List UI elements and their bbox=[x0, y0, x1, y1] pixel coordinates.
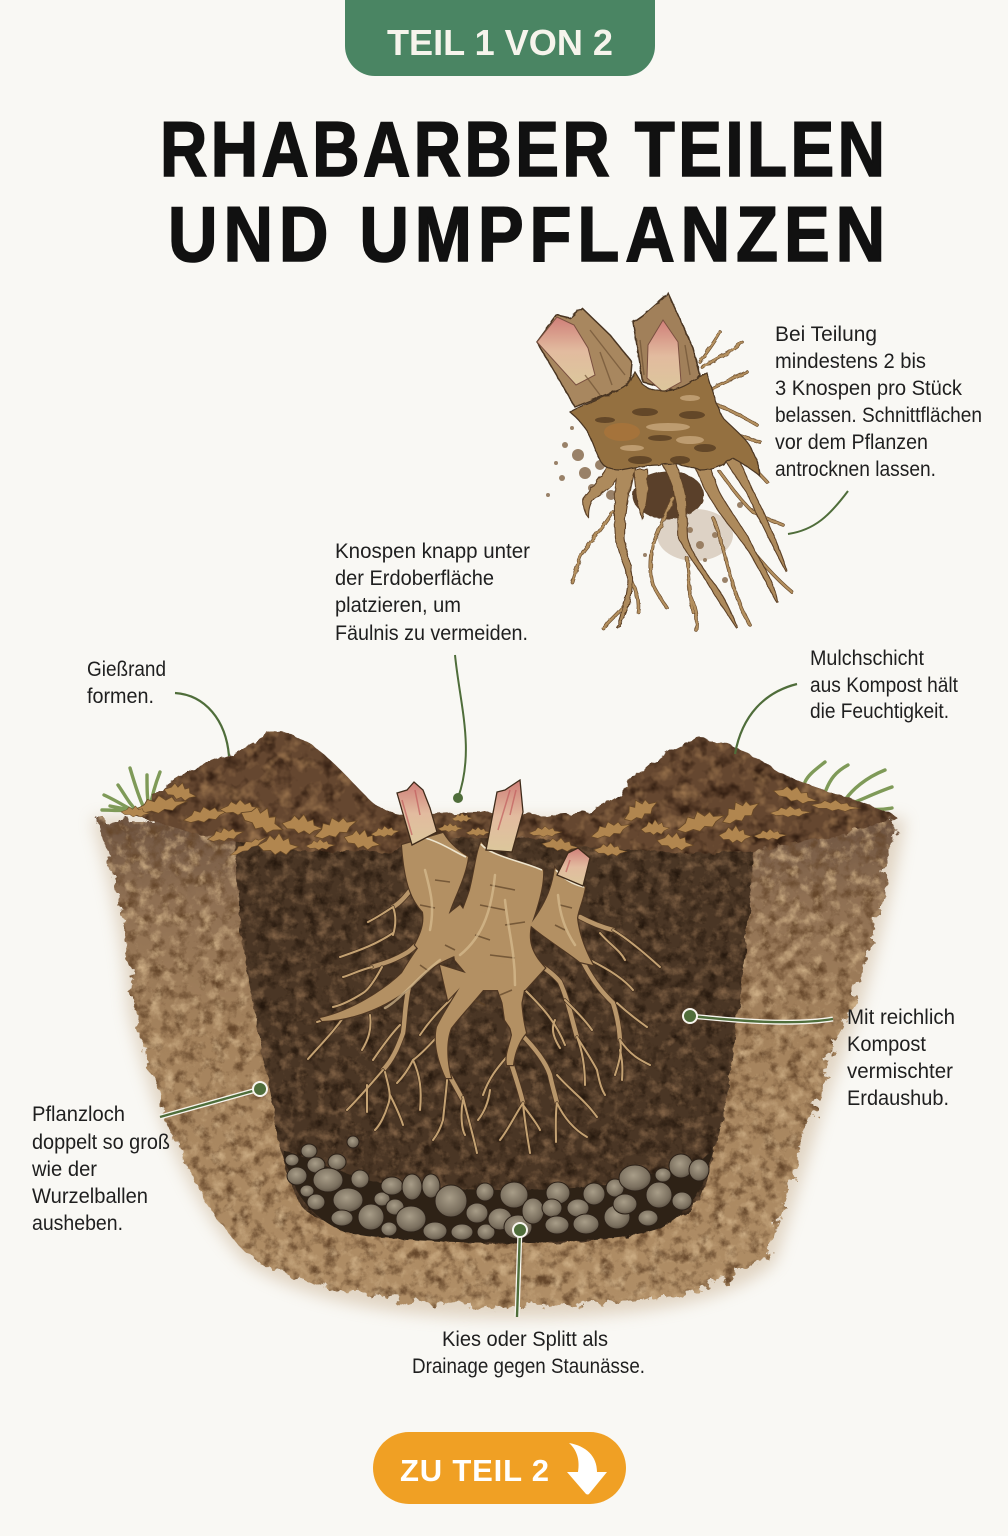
label: Knospen: der Erdoberfläche bbox=[335, 567, 494, 590]
title bbox=[160, 107, 885, 278]
crown body bbox=[570, 372, 760, 476]
root hairs outline bbox=[572, 332, 792, 630]
label: Teilung bbox=[775, 323, 982, 481]
label: Teilung: 3 Knospen pro Stück bbox=[775, 377, 962, 400]
label: Pflanzloch: ausheben. bbox=[32, 1212, 123, 1235]
label: Erdaushub bbox=[847, 1006, 955, 1110]
label: Erdaushub: Kompost bbox=[847, 1033, 926, 1056]
bud streaks bbox=[402, 790, 570, 872]
thin roots outline bbox=[308, 907, 660, 1153]
root fingers outline bbox=[584, 438, 787, 628]
compost mounds and mulch bed bbox=[135, 732, 895, 853]
label: Knospen: Knospen knapp unter bbox=[335, 540, 530, 563]
label: Erdaushub: Erdaushub. bbox=[847, 1087, 949, 1110]
label: Pflanzloch: Pflanzloch bbox=[32, 1103, 125, 1126]
dark root centre bbox=[632, 471, 704, 519]
label: Pflanzloch: doppelt so groß bbox=[32, 1131, 170, 1154]
left pink bud bbox=[537, 317, 595, 385]
label: Teilung: vor dem Pflanzen bbox=[775, 431, 928, 454]
button: Zu Teil 2: ZU TEIL 2 bbox=[400, 1453, 549, 1488]
thin roots bbox=[308, 907, 660, 1153]
left bud bbox=[397, 782, 437, 845]
title: RHABARBER TEILEN bbox=[160, 107, 885, 193]
illustration: planting hole cross-section bbox=[92, 732, 905, 1318]
medium roots bbox=[372, 887, 620, 1103]
mulch leaves bbox=[121, 779, 861, 858]
label: Pflanzloch bbox=[31, 1103, 170, 1235]
leader line: Pflanzloch bbox=[160, 1082, 267, 1117]
label: Teilung: Bei Teilung bbox=[775, 323, 877, 346]
leader line: Gießrand bbox=[175, 693, 229, 756]
label: Kies: Drainage gegen Staunässe. bbox=[412, 1355, 645, 1378]
main roots bbox=[320, 833, 593, 1078]
centre bud bbox=[486, 780, 523, 852]
button: Zu Teil 2 bbox=[373, 1432, 626, 1504]
label: Pflanzloch: Wurzelballen bbox=[32, 1185, 148, 1208]
dirt wash below roots bbox=[657, 509, 733, 561]
banner: Teil 1 von 2: TEIL 1 VON 2 bbox=[387, 22, 613, 63]
crown markings bbox=[595, 395, 716, 464]
leader line: Teilung bbox=[788, 491, 848, 534]
root hairs bbox=[572, 332, 792, 630]
illustration: divided rhubarb root bbox=[537, 293, 792, 630]
label: Mulchschicht: Mulchschicht bbox=[810, 647, 924, 670]
main roots outline bbox=[320, 833, 593, 1078]
label: Knospen: Fäulnis zu vermeiden. bbox=[335, 622, 528, 645]
dark compost soil in hole bbox=[235, 835, 755, 1243]
label: Gießrand formen: formen. bbox=[87, 685, 154, 708]
leader line: Erdaushub bbox=[683, 1009, 833, 1023]
icon: curved down arrow bbox=[567, 1443, 607, 1494]
label: Pflanzloch: wie der bbox=[31, 1158, 97, 1181]
collar rims bbox=[425, 838, 584, 887]
root highlights bbox=[385, 870, 575, 1008]
label: Gießrand formen bbox=[87, 658, 166, 708]
grass tufts bbox=[102, 762, 892, 812]
right bud stalk bbox=[633, 293, 700, 392]
title: UND UMPFLANZEN bbox=[168, 190, 885, 278]
label: Gießrand formen: Gießrand bbox=[87, 658, 166, 681]
root texture bbox=[420, 880, 572, 1005]
banner: Teil 1 von 2 bbox=[345, 0, 655, 76]
leader line: Mulchschicht bbox=[735, 684, 797, 754]
leader line: Knospen bbox=[453, 655, 466, 803]
label: Erdaushub: vermischter bbox=[847, 1060, 953, 1083]
left bud stalk bbox=[537, 308, 632, 407]
label: Knospen: platzieren, um bbox=[335, 594, 461, 617]
label: Teilung: mindestens 2 bis bbox=[775, 350, 926, 373]
leader line: Kies bbox=[513, 1223, 527, 1317]
label: Mulchschicht: aus Kompost hält bbox=[810, 674, 958, 697]
label: Kies bbox=[412, 1328, 645, 1378]
loose soil crumbs bbox=[546, 426, 754, 583]
sandy soil body bbox=[98, 820, 897, 1307]
right pink bud bbox=[647, 320, 681, 392]
stalk grain bbox=[585, 330, 690, 395]
label: Teilung: antrocknen lassen. bbox=[775, 458, 936, 481]
label: Mulchschicht bbox=[810, 647, 958, 723]
drainage gravel bbox=[283, 1136, 712, 1243]
label: Erdaushub: Mit reichlich bbox=[847, 1006, 955, 1029]
surrounding soil wash bbox=[92, 818, 905, 1318]
label: Knospen bbox=[335, 540, 530, 645]
label: Mulchschicht: die Feuchtigkeit. bbox=[810, 700, 949, 723]
label: Teilung: belassen. Schnittflächen bbox=[775, 404, 982, 427]
root fingers bbox=[584, 438, 787, 628]
right bud bbox=[557, 848, 590, 886]
label: Kies: Kies oder Splitt als bbox=[442, 1328, 608, 1351]
medium roots outline bbox=[372, 887, 620, 1103]
